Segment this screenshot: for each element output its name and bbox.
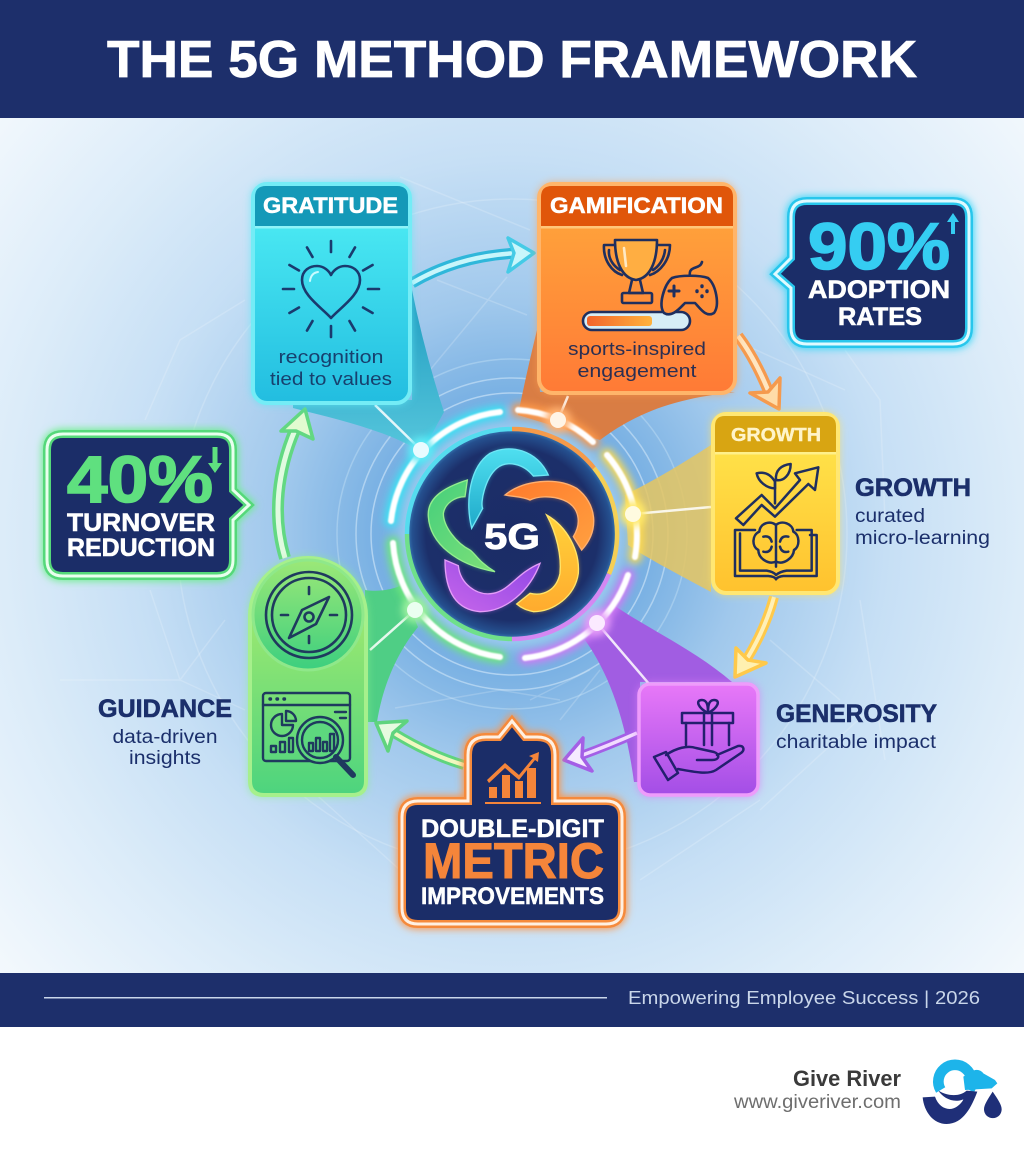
node connectors (370, 396, 711, 685)
arrow: gamification to growth (738, 336, 780, 409)
panel: gratitude (251, 182, 412, 405)
panel: guidance (248, 556, 368, 797)
description: recognition (278, 347, 384, 367)
brand url: www.giveriver.com (733, 1092, 901, 1113)
side label: guidance (98, 695, 232, 769)
arrow: gratitude to gamification (412, 238, 534, 283)
central hub (370, 396, 711, 685)
arrow: generosity to metric (564, 733, 637, 771)
description: tied to values (270, 369, 392, 389)
brand name: Give River (793, 1066, 901, 1091)
label: RATES (838, 303, 922, 331)
ring nodes (402, 407, 646, 636)
panel: generosity (637, 682, 760, 797)
side label: guidance: insights (129, 748, 201, 769)
icon: hand with gift (654, 700, 743, 780)
heading: GRATITUDE (263, 193, 398, 218)
description: engagement (578, 361, 696, 381)
description (270, 347, 392, 389)
stat 90%: 90% (808, 209, 950, 283)
side label: growth: micro-learning (855, 528, 990, 549)
description (568, 339, 706, 381)
side label: growth (855, 474, 990, 549)
callout: double-digit metric improvements (402, 721, 622, 924)
hub colored ring (407, 429, 617, 639)
description: sports-inspired (568, 339, 706, 359)
hub glow (398, 420, 626, 648)
side label: growth: curated (855, 506, 925, 527)
stat 40%: 40% (67, 442, 213, 516)
main panel background (0, 118, 1024, 973)
label: REDUCTION (67, 534, 215, 562)
icon: up arrow (947, 213, 959, 234)
decorative web (60, 177, 885, 880)
side label: generosity: charitable impact (776, 732, 937, 753)
heading: GROWTH (731, 425, 821, 445)
icon: heart with rays (283, 241, 379, 337)
segmented outer ring (391, 410, 637, 658)
footer tagline: Empowering Employee Success | 2026 (628, 988, 980, 1008)
callout: double-digit metric improvements: IMPROVEMENTS (421, 883, 604, 910)
connector wedges (293, 290, 735, 782)
label: ADOPTION (808, 276, 950, 304)
icon: rising bar chart (485, 752, 541, 804)
side label: growth: GROWTH (855, 474, 971, 502)
label: TURNOVER (67, 509, 215, 537)
side label: generosity: GENEROSITY (776, 700, 937, 728)
arrow: growth to generosity (735, 597, 774, 677)
panel: gamification (537, 182, 737, 395)
hub label 5G: 5G (484, 516, 540, 557)
icon: arrow, sprout, brain and book (735, 464, 818, 579)
icon: down arrow (208, 447, 222, 473)
hub disc (407, 429, 617, 639)
header band (0, 0, 1024, 118)
label: DOUBLE-DIGIT (421, 815, 604, 843)
callout: 90% adoption (775, 201, 969, 344)
callout: 40% turnover (47, 434, 249, 576)
label (808, 276, 950, 331)
icon: trophy, controller and progress bar (583, 240, 717, 330)
arrow: guidance to gratitude (278, 409, 313, 558)
icon: dashboard with magnifier (263, 693, 353, 775)
arrow: metric to guidance (376, 721, 464, 765)
logo (923, 1065, 1002, 1124)
icon: compass (253, 560, 363, 670)
side label: guidance: GUIDANCE (98, 695, 232, 723)
callout: double-digit metric improvements: METRIC (423, 833, 604, 889)
title: THE 5G METHOD FRAMEWORK (107, 31, 917, 89)
side label: guidance: data-driven (112, 727, 218, 748)
panel: growth (711, 412, 840, 595)
side label: generosity (776, 700, 937, 753)
interlocking swirl logo (428, 449, 594, 612)
footer band (0, 973, 1024, 1027)
heading: GAMIFICATION (550, 193, 723, 218)
label (67, 509, 215, 562)
